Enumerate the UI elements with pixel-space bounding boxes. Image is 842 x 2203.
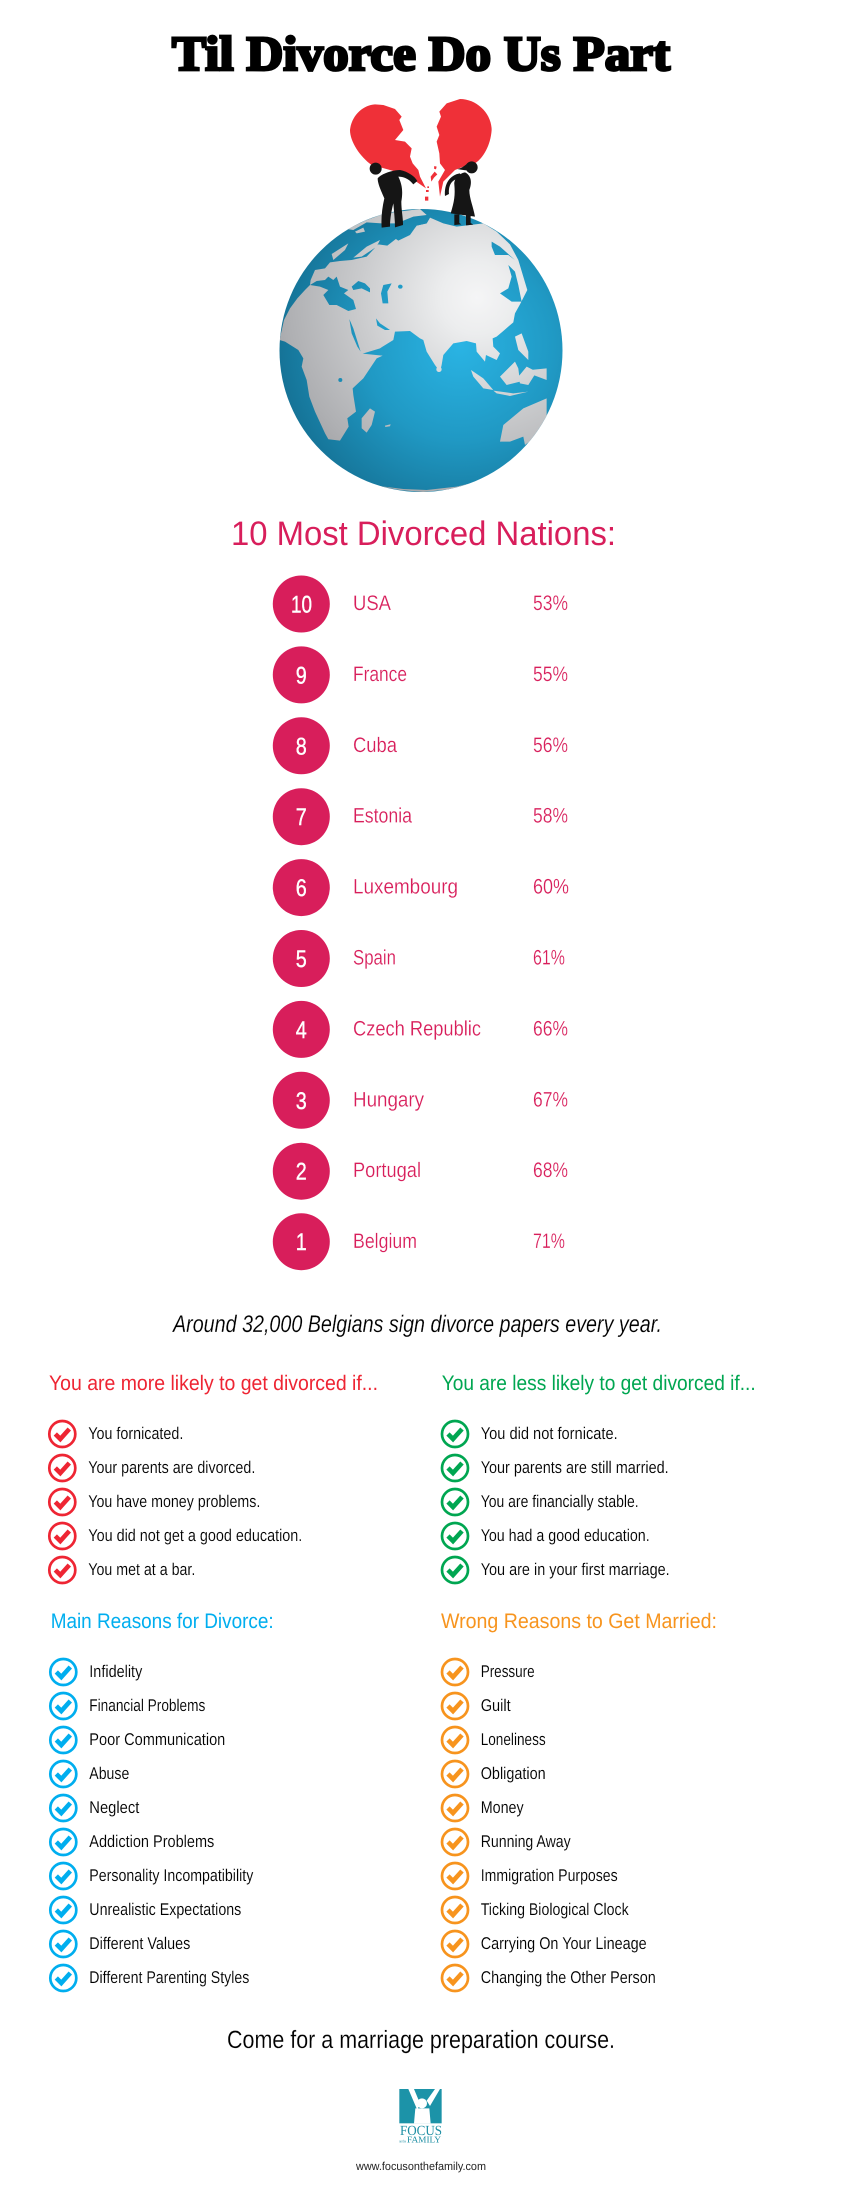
- item: Poor Communication: [89, 1730, 225, 1749]
- website url: www.focusonthefamily.com: [355, 2161, 486, 2173]
- item: [50, 1897, 241, 1923]
- icon: teal square with figure: [399, 2089, 442, 2123]
- heading: Main Reasons for Divorce:: [51, 1610, 274, 1633]
- item: Loneliness: [481, 1730, 546, 1749]
- item: Pressure: [481, 1662, 535, 1681]
- row: Cuba: 56%: [533, 734, 568, 757]
- item: [50, 1659, 143, 1685]
- row: France: [273, 646, 568, 703]
- item: Your parents are divorced.: [88, 1458, 255, 1477]
- item: Unrealistic Expectations: [89, 1900, 241, 1919]
- illustration: broken heart and couple: [350, 99, 492, 228]
- title: Til Divorce Do Us Part: [172, 26, 671, 81]
- item: [49, 1557, 195, 1583]
- item: Personality Incompatibility: [89, 1866, 254, 1885]
- row: Estonia: [273, 788, 568, 845]
- wordmark: FOCUS: [400, 2124, 442, 2139]
- item: [50, 1761, 129, 1787]
- row: Estonia: 7: [296, 804, 307, 831]
- item: Different Parenting Styles: [89, 1968, 249, 1987]
- woman: [445, 161, 478, 225]
- item: You met at a bar.: [88, 1560, 195, 1579]
- row: Hungary: 67%: [533, 1088, 568, 1111]
- heading: You are more likely to get divorced if...: [49, 1372, 378, 1395]
- row: USA: 10: [291, 592, 312, 618]
- row: Cuba: Cuba: [353, 734, 397, 757]
- row: Estonia: Estonia: [353, 805, 412, 828]
- item: [442, 1829, 571, 1855]
- item: [442, 1931, 647, 1957]
- heading: Wrong Reasons to Get Married:: [441, 1610, 717, 1633]
- item: [50, 1795, 140, 1821]
- row: Spain: 5: [296, 946, 307, 973]
- row: Portugal: 2: [296, 1159, 307, 1186]
- item: [49, 1421, 183, 1447]
- item: Abuse: [89, 1764, 129, 1783]
- item: [442, 1455, 669, 1481]
- right heart half: [437, 99, 492, 197]
- row: Portugal: 68%: [533, 1159, 568, 1182]
- wordmark: on the: [399, 2138, 406, 2144]
- panel: more likely: [49, 1372, 378, 1583]
- row: Czech Republic: Czech Republic: [353, 1017, 481, 1040]
- row: USA: 53%: [533, 592, 568, 615]
- row: Luxembourg: Luxembourg: [353, 876, 458, 899]
- row: USA: [273, 576, 568, 632]
- item: [442, 1489, 639, 1515]
- wordmark: FAMILY: [407, 2134, 442, 2144]
- item: Guilt: [481, 1696, 511, 1715]
- row: Estonia: 58%: [533, 805, 568, 828]
- row: France: 55%: [533, 663, 568, 686]
- item: [49, 1489, 260, 1515]
- item: [442, 1557, 670, 1583]
- item: [49, 1455, 255, 1481]
- row: France: France: [353, 663, 407, 686]
- item: You did not fornicate.: [481, 1424, 618, 1443]
- left heart half: [350, 104, 426, 188]
- statement: Belgians: Around 32,000 Belgians sign divorce papers every year.: [171, 1311, 662, 1338]
- row: Czech Republic: [273, 1001, 568, 1058]
- row: USA: USA: [353, 592, 391, 615]
- item: Obligation: [481, 1764, 546, 1783]
- row: Spain: Spain: [353, 946, 396, 970]
- row: Belgium: Belgium: [353, 1230, 417, 1253]
- item: You fornicated.: [88, 1424, 183, 1443]
- row: Belgium: [273, 1213, 565, 1270]
- item: You did not get a good education.: [88, 1526, 302, 1545]
- item: [442, 1727, 546, 1753]
- row: Czech Republic: 4: [296, 1017, 307, 1044]
- man: [370, 163, 417, 228]
- item: [442, 1421, 618, 1447]
- item: [442, 1523, 650, 1549]
- illustration: globe: [280, 209, 562, 492]
- item: You had a good education.: [481, 1526, 650, 1545]
- item: Changing the Other Person: [481, 1968, 656, 1987]
- ranking list: [273, 576, 569, 1270]
- item: You have money problems.: [88, 1492, 260, 1511]
- panel: main reasons for divorce: [50, 1610, 274, 1991]
- item: Addiction Problems: [89, 1832, 214, 1851]
- item: Carrying On Your Lineage: [481, 1934, 647, 1953]
- item: Neglect: [89, 1798, 140, 1817]
- item: Your parents are still married.: [481, 1458, 669, 1477]
- item: [442, 1965, 656, 1991]
- item: Running Away: [481, 1832, 571, 1851]
- heart fragments: [425, 166, 437, 201]
- row: Hungary: [273, 1072, 568, 1129]
- row: Portugal: [273, 1143, 568, 1200]
- wordmark: [399, 2124, 442, 2144]
- row: Hungary: 3: [296, 1088, 307, 1115]
- row: Hungary: Hungary: [353, 1088, 424, 1111]
- item: Immigration Purposes: [481, 1866, 618, 1885]
- item: [442, 1863, 618, 1889]
- item: [50, 1727, 225, 1753]
- continents: [280, 209, 547, 492]
- row: Spain: 61%: [533, 946, 565, 970]
- call to action: Come for a marriage preparation course.: [227, 2026, 615, 2054]
- row: Belgium: 1: [296, 1229, 307, 1256]
- row: Portugal: Portugal: [353, 1159, 421, 1182]
- item: [442, 1761, 546, 1787]
- item: [49, 1523, 302, 1549]
- item: [442, 1897, 629, 1923]
- row: Czech Republic: 66%: [533, 1017, 568, 1040]
- row: Spain: [273, 930, 565, 987]
- item: [50, 1931, 190, 1957]
- item: [50, 1863, 254, 1889]
- row: Cuba: [273, 717, 568, 774]
- item: You are in your first marriage.: [481, 1560, 670, 1579]
- item: Money: [481, 1798, 524, 1817]
- panel: less likely: [442, 1372, 756, 1583]
- row: Luxembourg: 6: [296, 875, 307, 902]
- row: Luxembourg: 60%: [533, 876, 569, 899]
- row: France: 9: [296, 662, 307, 689]
- item: [442, 1795, 524, 1821]
- panel: wrong reasons to get married: [441, 1610, 717, 1991]
- heading: 10 most divorced nations: 10 Most Divorced Nations:: [231, 515, 616, 553]
- item: Financial Problems: [89, 1696, 205, 1715]
- item: You are financially stable.: [481, 1492, 639, 1511]
- row: Belgium: 71%: [533, 1230, 565, 1253]
- item: Infidelity: [89, 1662, 143, 1681]
- item: [50, 1965, 249, 1991]
- item: [50, 1829, 214, 1855]
- row: Cuba: 8: [296, 733, 307, 760]
- item: Different Values: [89, 1934, 190, 1953]
- row: Luxembourg: [273, 859, 569, 916]
- logo: Focus on the Family: [399, 2089, 442, 2144]
- item: Ticking Biological Clock: [481, 1900, 629, 1919]
- item: [442, 1693, 511, 1719]
- item: [50, 1693, 205, 1719]
- item: [442, 1659, 535, 1685]
- heading: You are less likely to get divorced if...: [442, 1372, 756, 1395]
